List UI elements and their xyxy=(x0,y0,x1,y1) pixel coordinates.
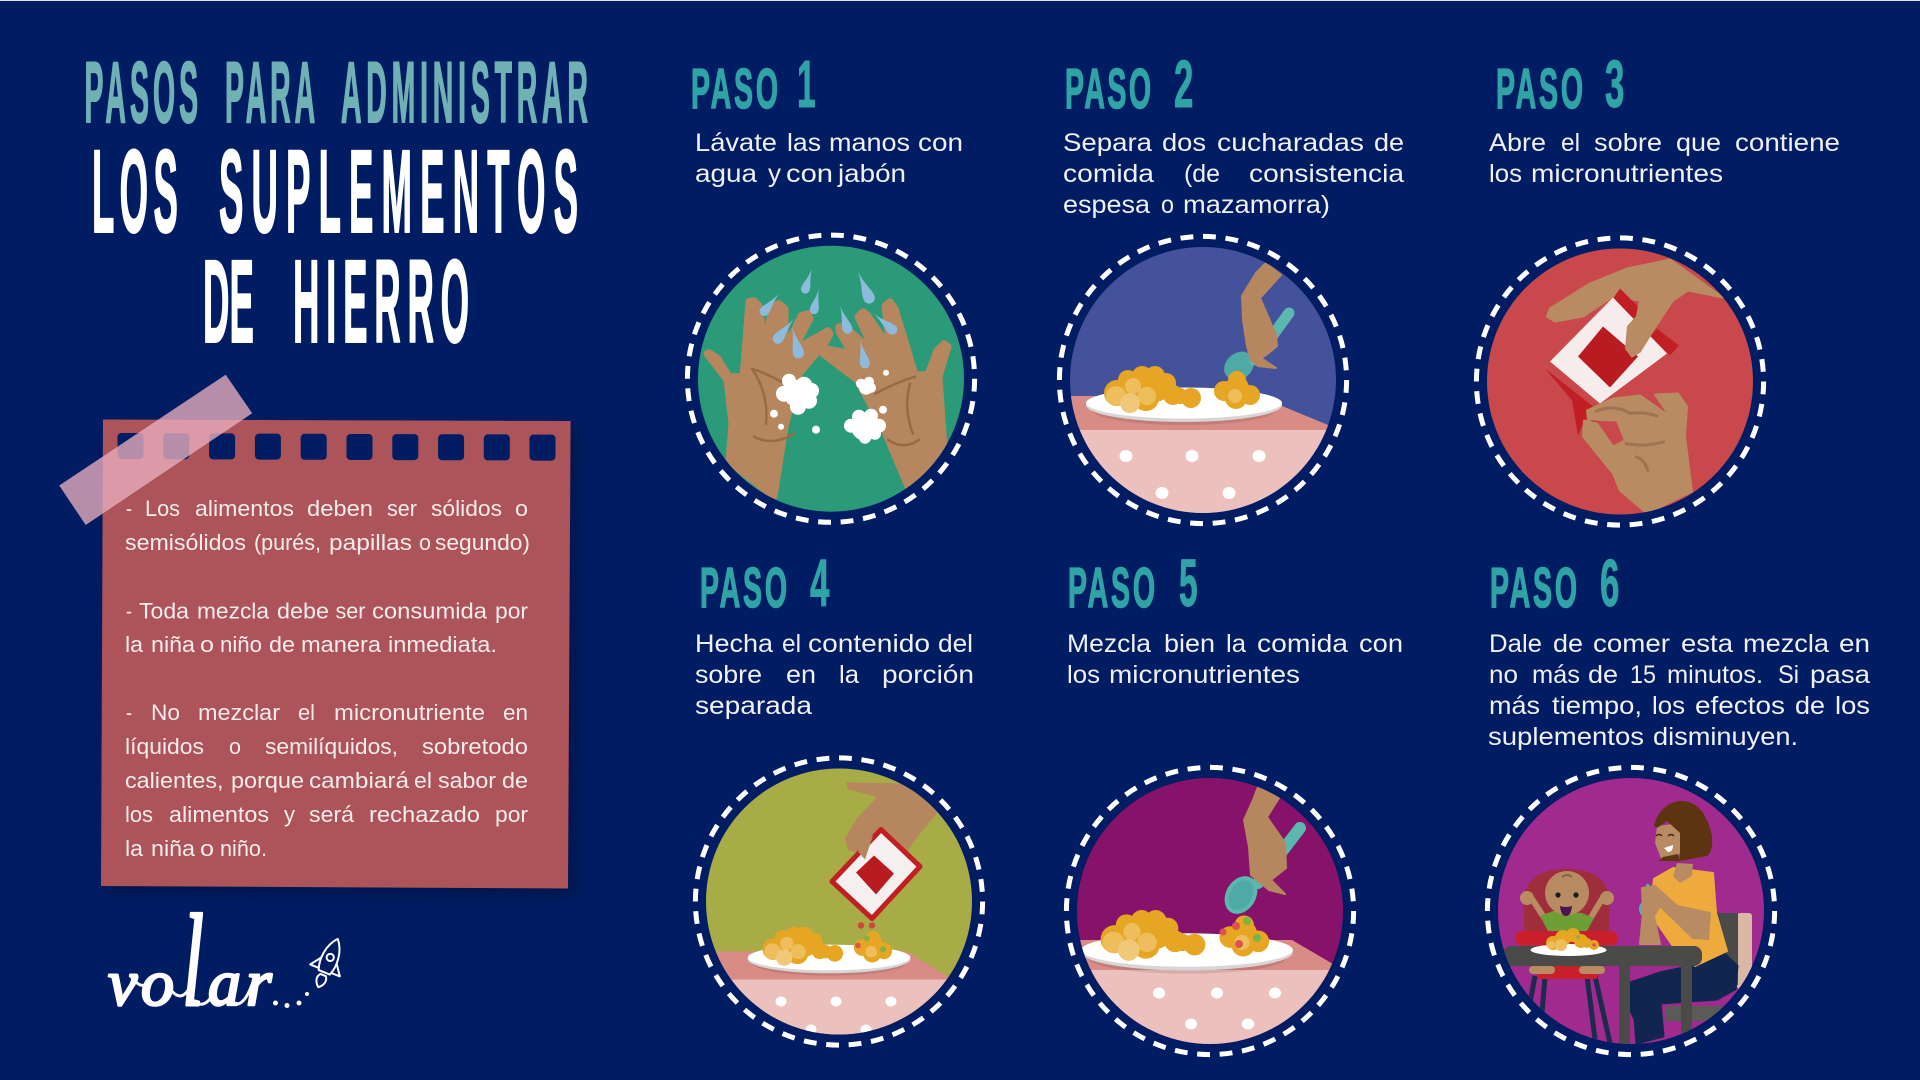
step 1 text: con xyxy=(786,160,833,188)
step 6 text: pasa xyxy=(1810,661,1870,689)
notes text: sobretodo xyxy=(422,734,528,759)
step 4 text: la xyxy=(839,661,859,689)
step 5 heading xyxy=(1068,547,1198,621)
step 5 text: la xyxy=(1226,630,1246,658)
logo wordmark: l xyxy=(182,887,204,1034)
step 6 text: disminuyen. xyxy=(1653,723,1798,751)
icon: rocket xyxy=(303,933,353,993)
notes text: manera xyxy=(301,632,382,657)
step 5 text: comida xyxy=(1257,630,1348,658)
notes text: Los xyxy=(145,496,180,521)
notes text: niño. xyxy=(220,836,267,861)
title line: de hierro: DE xyxy=(203,235,254,368)
notes text: mezclar xyxy=(198,700,280,725)
step 6 text: de xyxy=(1588,661,1618,689)
notes text: - xyxy=(126,700,132,725)
notes text: o xyxy=(200,836,214,861)
notes text: deben xyxy=(307,496,373,521)
step 3 text: Abre xyxy=(1489,129,1546,157)
notes text: Toda xyxy=(139,598,190,624)
notes text: inmediata. xyxy=(388,632,497,657)
step 1 heading xyxy=(691,48,816,122)
note paper xyxy=(101,420,571,888)
notes text: niña xyxy=(151,836,196,861)
notes text: en xyxy=(503,700,528,725)
step 2 text: o xyxy=(1161,191,1174,219)
step 3 text: sobre xyxy=(1594,129,1662,157)
notes text: mezcla xyxy=(197,598,270,624)
step 4 heading: 4 xyxy=(810,547,830,621)
notes text: ser xyxy=(387,496,417,521)
step 6 text: Si xyxy=(1778,661,1799,689)
title line: pasos para administrar: ADMINISTRAR xyxy=(341,44,588,141)
step 1 heading: PASO xyxy=(691,56,778,121)
illustration: washing hands xyxy=(687,235,975,522)
step 6 text: tiempo, xyxy=(1552,692,1642,720)
logo wordmark: v xyxy=(108,947,138,1020)
logo wordmark xyxy=(108,887,272,1034)
step 6 text: en xyxy=(1839,630,1870,658)
step 3 text: micronutrientes xyxy=(1531,160,1723,188)
step 2 text: Separa xyxy=(1063,129,1152,157)
notes text: o xyxy=(200,632,214,657)
illustration: pouring sachet on food xyxy=(695,758,983,1045)
notes text: (purés, xyxy=(254,530,321,555)
perforation holes xyxy=(118,433,556,461)
step 6 text: más xyxy=(1532,661,1580,689)
logo dots xyxy=(273,992,309,1008)
step 3 text: el xyxy=(1561,129,1580,157)
tape xyxy=(59,375,252,525)
step 3 text: los xyxy=(1489,160,1522,188)
step 4 text: porción xyxy=(882,661,974,689)
step 6 text: de xyxy=(1553,630,1583,658)
step 6 text: comer xyxy=(1593,630,1670,658)
notes text: cambiará xyxy=(309,768,410,793)
title xyxy=(84,44,588,368)
step 4 text: en xyxy=(786,661,816,689)
notes text: será xyxy=(309,802,355,827)
step 4 heading: PASO xyxy=(700,555,787,620)
step 6 heading: 6 xyxy=(1600,547,1619,621)
step 1 text: agua xyxy=(695,160,757,188)
notes text: alimentos xyxy=(169,802,269,827)
step 4 text: contenido xyxy=(808,630,930,658)
step 4 text: separada xyxy=(695,692,812,720)
step 6 text: efectos xyxy=(1695,692,1785,720)
notes text: alimentos xyxy=(195,496,294,521)
step 5 text: micronutrientes xyxy=(1109,661,1300,689)
notes text: porque xyxy=(231,768,304,793)
title line: los suplementos: SUPLEMENTOS xyxy=(219,125,578,258)
title line: pasos para administrar xyxy=(84,44,588,141)
notes text: consumida xyxy=(372,598,488,624)
step 6 text: minutos. xyxy=(1667,661,1763,689)
step 3 heading: 3 xyxy=(1605,48,1624,122)
step 6 text: de xyxy=(1795,692,1825,720)
step 3 xyxy=(1476,48,1840,525)
notes text: de xyxy=(269,632,295,657)
step 2 text: mazamorra) xyxy=(1183,191,1330,219)
step 5 text xyxy=(1067,630,1403,689)
step 4 xyxy=(695,547,983,1045)
illustration: separating food with spoon xyxy=(1059,236,1347,524)
step 5 text: bien xyxy=(1164,630,1215,658)
step 1 text: jabón xyxy=(837,160,906,188)
logo connecting strokes xyxy=(136,979,253,1004)
step 6 text: mezcla xyxy=(1743,630,1829,658)
step 3 text: contiene xyxy=(1735,129,1840,157)
step 2 text: de xyxy=(1374,129,1404,157)
step 4 text: Hecha xyxy=(695,630,773,658)
step 1 text: las xyxy=(787,129,821,157)
step 2 xyxy=(1059,48,1404,524)
step 2 heading: PASO xyxy=(1065,56,1151,121)
notes text: la xyxy=(125,836,144,861)
notes text: líquidos xyxy=(125,734,204,759)
step 2 heading: 2 xyxy=(1174,48,1193,122)
logo: volar xyxy=(108,887,353,1034)
step 6 heading xyxy=(1490,547,1619,621)
step 2 text xyxy=(1063,129,1404,219)
step 6 text: esta xyxy=(1681,630,1733,658)
illustration: opening sachet xyxy=(1476,238,1764,525)
step 2 text: dos xyxy=(1162,129,1206,157)
notes text: micronutriente xyxy=(334,700,485,725)
notes text: la xyxy=(125,632,144,657)
step 5 text: los xyxy=(1067,661,1100,689)
step 6 text: los xyxy=(1652,692,1685,720)
step 6 heading: PASO xyxy=(1490,555,1577,620)
notes text: calientes, xyxy=(125,768,224,793)
notes text: ser xyxy=(336,598,366,624)
notes text: o xyxy=(515,496,528,521)
step 6 text xyxy=(1488,630,1870,751)
title line: los suplementos: LOS xyxy=(92,125,178,258)
step 1 text: y xyxy=(768,160,782,188)
title line: de hierro: HIERRO xyxy=(293,235,469,368)
notes text: No xyxy=(151,700,180,725)
notes text: niña xyxy=(151,632,196,657)
notes text: - xyxy=(126,496,132,521)
notes text: y xyxy=(284,802,295,827)
notes text xyxy=(125,496,530,861)
step 1 text: Lávate xyxy=(695,129,777,157)
step 5 text: Mezcla xyxy=(1067,630,1151,658)
notes text: segundo) xyxy=(435,530,530,555)
step 1 xyxy=(687,48,975,522)
step 4 text xyxy=(695,630,974,720)
step 5 text: con xyxy=(1359,630,1403,658)
step 6 text: suplementos xyxy=(1488,723,1644,751)
step 4 text: sobre xyxy=(695,661,762,689)
step 1 text: con xyxy=(918,129,963,157)
step 3 text xyxy=(1489,129,1840,188)
step 5 heading: 5 xyxy=(1179,547,1198,621)
notes text: - xyxy=(126,598,132,624)
notes text: niño xyxy=(220,632,262,657)
title line: pasos para administrar: PARA xyxy=(225,44,315,141)
step 6 text: 15 xyxy=(1630,661,1656,689)
logo wordmark: o xyxy=(141,947,174,1020)
step 2 text: comida xyxy=(1063,160,1154,188)
step 2 text: (de xyxy=(1184,160,1220,188)
step 1 text xyxy=(695,129,963,188)
step 3 text: que xyxy=(1676,129,1721,157)
notes text: sólidos xyxy=(431,496,502,521)
step 1 text: manos xyxy=(829,129,910,157)
notes text: por xyxy=(495,598,528,624)
step 1 heading: 1 xyxy=(797,48,816,122)
notes text: el xyxy=(414,768,432,793)
step 6 text: no xyxy=(1489,661,1518,689)
step 6 text: más xyxy=(1489,692,1540,720)
step 2 text: consistencia xyxy=(1249,160,1404,188)
step 3 heading xyxy=(1496,48,1624,122)
step 5 xyxy=(1066,547,1403,1055)
notes text: de xyxy=(502,768,528,793)
step 5 heading: PASO xyxy=(1068,555,1155,620)
title line: de hierro xyxy=(203,235,469,368)
step 2 text: espesa xyxy=(1063,191,1150,219)
step 4 heading xyxy=(700,547,830,621)
notes text: rechazado xyxy=(369,802,480,827)
notes text: debe xyxy=(277,598,329,624)
notes text: el xyxy=(298,700,315,725)
notes text: por xyxy=(495,802,528,827)
notes text: semisólidos xyxy=(125,530,246,555)
panel: notes xyxy=(59,375,571,888)
step 2 text: cucharadas xyxy=(1217,129,1364,157)
step 6 text: Dale xyxy=(1489,630,1542,658)
notes text: semilíquidos, xyxy=(265,734,398,759)
logo wordmark: r xyxy=(246,947,272,1020)
notes text: los xyxy=(125,802,153,827)
step 4 text: el xyxy=(782,630,801,658)
step 4 text: del xyxy=(938,630,973,658)
illustration: mother feeding baby xyxy=(1487,767,1775,1055)
step 3 heading: PASO xyxy=(1496,56,1583,121)
notes text: sabor xyxy=(438,768,496,793)
step 6 text: los xyxy=(1835,692,1870,720)
notes text: o xyxy=(419,530,431,555)
step 2 heading xyxy=(1065,48,1193,122)
logo wordmark: a xyxy=(208,947,241,1020)
notes text: papillas xyxy=(329,530,412,555)
step 6 xyxy=(1487,547,1870,1055)
illustration: mixing food xyxy=(1066,767,1354,1055)
notes text: o xyxy=(229,734,241,759)
title line: pasos para administrar: PASOS xyxy=(84,44,198,141)
